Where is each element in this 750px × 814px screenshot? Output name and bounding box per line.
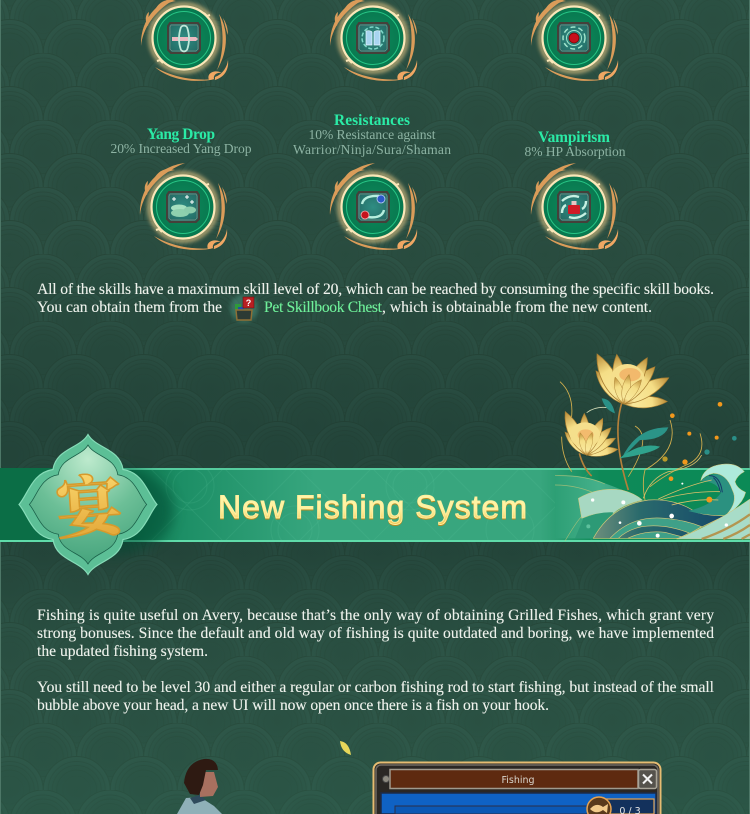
text block: fishing intro: the updated fishing system. — [37, 643, 208, 660]
skill medallion: top right — [531, 0, 618, 81]
text block: skill levels — [37, 281, 714, 322]
text block: fishing intro — [37, 607, 714, 660]
icon: pet skillbook chest: ? — [246, 298, 251, 308]
text block: skill levels: You can obtain them from the — [37, 299, 222, 316]
stems and sprigs — [560, 382, 702, 500]
text block: skill levels: Pet Skillbook Chest — [264, 299, 383, 316]
icon: medallion with coins — [140, 163, 227, 250]
illustration: flowers and waves — [555, 351, 750, 541]
icon: pet skillbook chest — [230, 294, 258, 322]
skill medallion: top middle — [330, 0, 417, 81]
icon: medallion with gems — [330, 163, 417, 250]
icon: medallion with potion — [531, 163, 618, 250]
emblem: ornamental badge with character — [19, 434, 174, 574]
banner title: New Fishing System — [218, 489, 527, 525]
title bar: Fishing — [501, 775, 535, 786]
banner band — [0, 468, 750, 542]
falling yellow leaf — [340, 741, 351, 755]
description: Yang Drop: 20% Increased Yang Drop — [110, 141, 252, 156]
text block: skill levels: , which is obtainable from the new content. — [382, 299, 652, 316]
description: Vampirism: 8% HP Absorption — [524, 144, 626, 159]
text block: fishing intro: strong bonuses. Since the default and old way of fishing is quite outdated and boring, we have implemented — [37, 625, 714, 642]
leaves — [602, 398, 668, 458]
fish counter — [587, 797, 654, 814]
description: Resistances — [293, 127, 451, 157]
heading: Resistances: Resistances — [334, 112, 410, 129]
water panel — [381, 793, 656, 814]
character: 宴 — [53, 452, 130, 552]
text block: skill levels: All of the skills have a maximum skill level of 20, which can be reached by consuming the specific skill books. — [37, 281, 714, 298]
heading: Yang Drop: Yang Drop — [147, 126, 215, 143]
game character — [177, 759, 222, 814]
description: Resistances: Warrior/Ninja/Sura/Shaman — [293, 142, 451, 157]
text block: fishing requirements: bubble above your head, a new UI will now open once there is a fish on your hook. — [37, 697, 549, 714]
text block: fishing requirements — [37, 679, 715, 714]
flower: upper — [589, 351, 671, 410]
flower: lower — [558, 409, 619, 459]
dots — [662, 402, 737, 503]
skill medallion: top left — [141, 0, 228, 81]
skill: Yang Drop — [110, 126, 252, 250]
text block: fishing requirements: You still need to be level 30 and either a regular or carbon fishing rod to start fishing, but instead of the small — [37, 679, 715, 696]
skill: Resistances — [293, 112, 451, 250]
waves — [555, 455, 750, 541]
description: Resistances: 10% Resistance against — [308, 127, 436, 142]
title bar — [382, 770, 638, 788]
heading: Vampirism: Vampirism — [538, 129, 610, 146]
text block: fishing intro: Fishing is quite useful on Avery, because that’s the only way of obtaining Grilled Fishes, which grant very — [37, 607, 714, 624]
banner: New Fishing System — [0, 351, 750, 574]
close button — [638, 770, 656, 788]
fishing window — [374, 762, 660, 814]
skill: Vampirism — [524, 129, 626, 250]
